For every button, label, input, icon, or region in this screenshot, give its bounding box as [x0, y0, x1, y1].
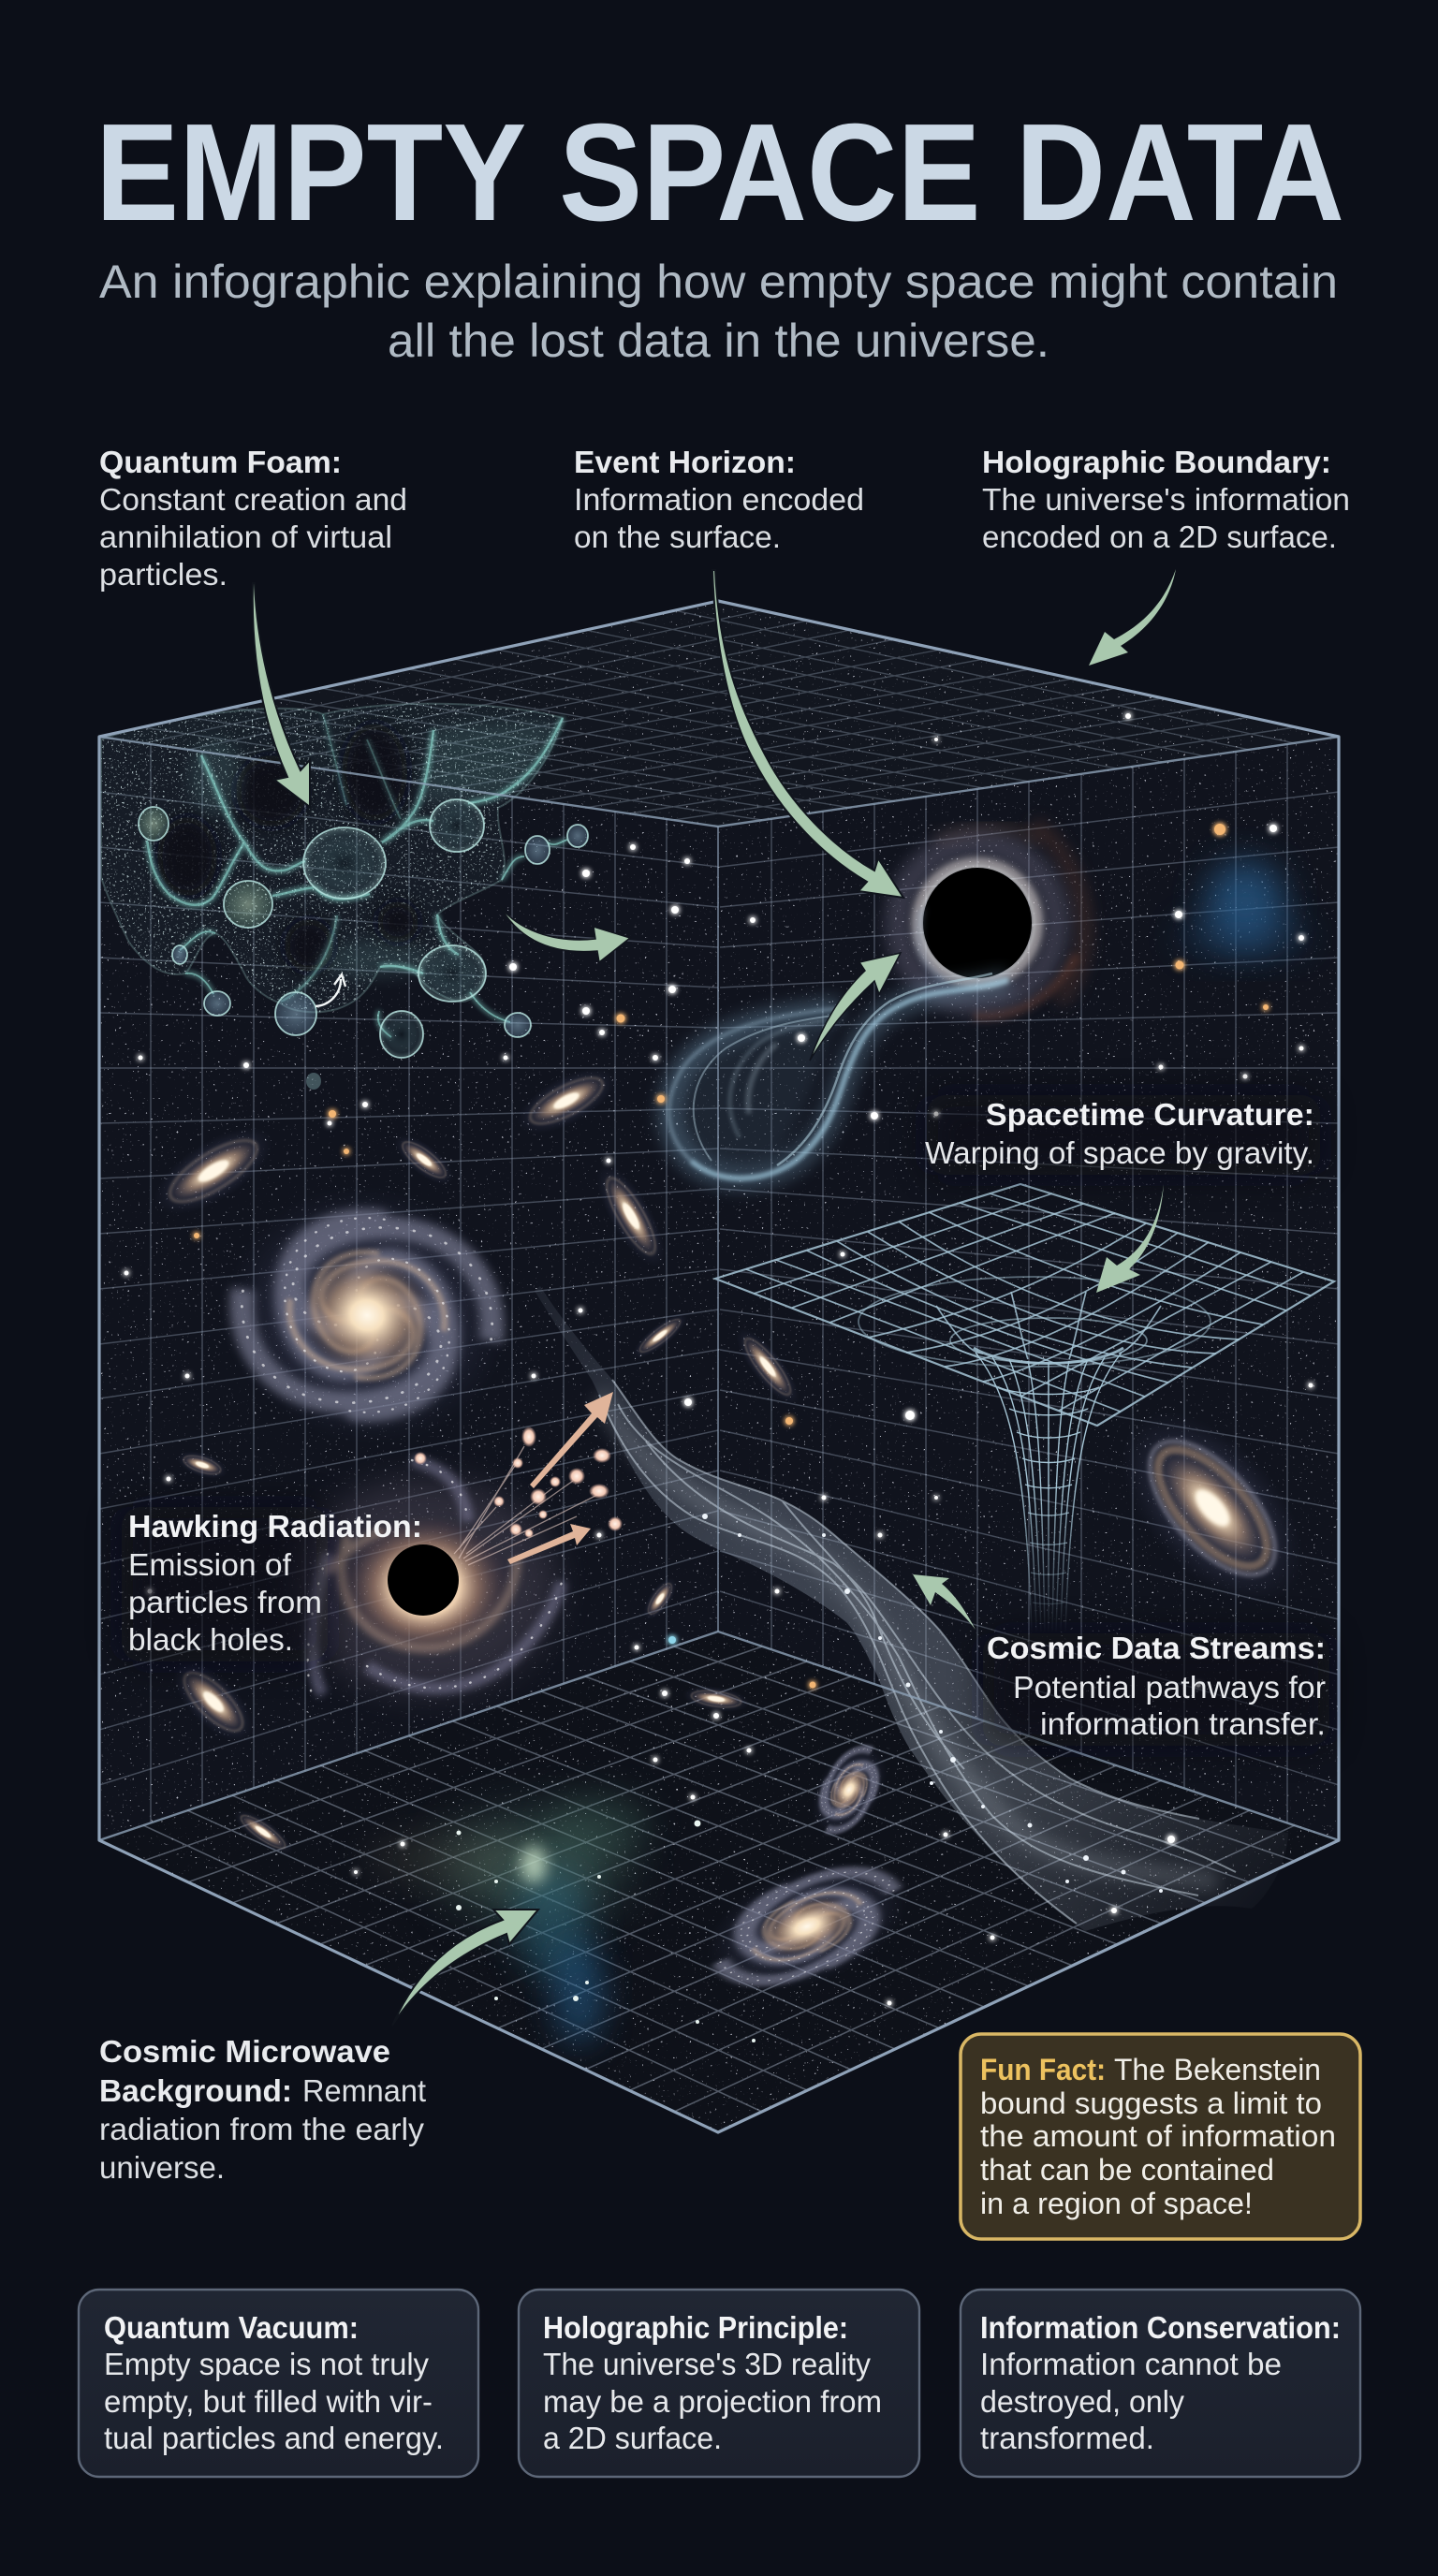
label: event horizon: Event Horizon: [574, 445, 796, 479]
arrow: spacetime curvature [1096, 1184, 1164, 1293]
callout: fun fact: in a region of space! [980, 2187, 1253, 2220]
label: cosmic microwave background: Background: [99, 2073, 292, 2108]
card: holographic principle: Holographic Principle: [543, 2310, 848, 2345]
foam speckle [99, 697, 567, 1016]
radiated particles [414, 1427, 623, 1538]
label: holographic boundary: Holographic Boundary: [982, 445, 1331, 479]
label: cosmic microwave background: radiation from the early [99, 2112, 425, 2146]
label: quantum foam: Quantum Foam: [99, 445, 342, 479]
bright stars [124, 713, 1313, 2005]
arrow: cosmic data streams [913, 1574, 976, 1630]
card: information conservation: Information Conservation: [980, 2310, 1341, 2345]
data stream into black hole [668, 908, 1008, 1178]
subtitle [99, 256, 1338, 367]
label: hawking radiation: Emission of [128, 1547, 292, 1582]
grid: right wall [720, 744, 1339, 1822]
warped sheet [715, 1184, 1334, 1426]
card: holographic principle: a 2D surface. [543, 2421, 722, 2455]
card: holographic principle: The universe's 3D reality [543, 2347, 871, 2381]
label: hawking radiation: particles from [128, 1585, 322, 1619]
label: hawking radiation [128, 1509, 422, 1657]
subtitle: An infographic explaining how empty space might contain [99, 256, 1338, 308]
callout: fun fact: the amount of information [980, 2119, 1336, 2153]
label: cosmic microwave background: universe. [99, 2150, 225, 2185]
label: hawking radiation: black holes. [128, 1622, 293, 1657]
label: event horizon: on the surface. [574, 520, 781, 554]
cosmic data stream ribbon [535, 1286, 1288, 1931]
label: cosmic microwave background: Remnant [302, 2073, 426, 2108]
label: spacetime curvature [925, 1097, 1314, 1170]
card: information conservation: destroyed, only [980, 2384, 1184, 2419]
funnel [976, 1353, 1122, 1633]
label: quantum foam: Constant creation and [99, 482, 407, 517]
label: cosmic data streams [987, 1631, 1326, 1741]
quantum foam [99, 697, 588, 1090]
label: spacetime curvature: Warping of space by gravity. [925, 1135, 1314, 1170]
label: holographic boundary [982, 445, 1350, 554]
label: quantum foam: particles. [99, 557, 227, 592]
grid: floor [143, 1647, 1295, 2112]
radiation rays [454, 1446, 597, 1565]
label: hawking radiation: Hawking Radiation: [128, 1509, 422, 1544]
nebula: blue cluster on right wall [1178, 860, 1309, 957]
grid: top face [143, 610, 1295, 820]
membrane [101, 704, 563, 1012]
arrow: holographic boundary [1089, 569, 1176, 666]
star field [99, 601, 1339, 2132]
card: quantum vacuum: Empty space is not truly [104, 2347, 429, 2381]
lobes of denser foam [189, 723, 557, 978]
arrow: cosmic microwave background [392, 1910, 538, 2026]
label: holographic boundary: The universe's information [982, 482, 1350, 517]
web strands [147, 714, 567, 1037]
label: quantum foam [99, 445, 407, 592]
card: information conservation [961, 2290, 1360, 2477]
cube faces [99, 601, 1339, 2132]
subtitle: all the lost data in the universe. [388, 315, 1049, 367]
small galaxies [140, 1055, 809, 1862]
panel: holographic cube [99, 601, 1339, 2132]
galaxy: large spiral [198, 1155, 536, 1475]
card: quantum vacuum: Quantum Vacuum: [104, 2310, 359, 2345]
arrow: event horizon [712, 570, 903, 898]
black hole: event horizon [899, 824, 1085, 1017]
card: information conservation: transformed. [980, 2421, 1154, 2455]
label: cosmic data streams: Cosmic Data Streams: [987, 1631, 1326, 1665]
text shadows inside cube [122, 1095, 1329, 1746]
card: holographic principle [519, 2290, 919, 2477]
label: holographic boundary: encoded on a 2D surface. [982, 520, 1337, 554]
card: quantum vacuum: empty, but filled with vir- [104, 2384, 433, 2419]
label: cosmic data streams: Potential pathways for [1013, 1670, 1326, 1705]
arrow: stream to black hole [810, 953, 901, 1061]
galaxy: floor spiral [689, 1837, 925, 2016]
bubbles [139, 799, 588, 1090]
title: EMPTY SPACE DATA [95, 95, 1344, 250]
card: quantum vacuum: tual particles and energy. [104, 2421, 444, 2455]
callout: fun fact: bound suggests a limit to [980, 2086, 1322, 2120]
nebula: cosmic microwave background [365, 1793, 756, 2045]
label: cosmic microwave background: Cosmic Microwave [99, 2034, 390, 2069]
label: cosmic data streams: information transfer. [1040, 1706, 1326, 1741]
galaxy: right wall elliptical [1087, 1379, 1338, 1637]
spacetime curvature grid [715, 1184, 1334, 1633]
card: quantum vacuum [79, 2290, 478, 2477]
card: holographic principle: may be a projection from [543, 2384, 882, 2419]
galaxy: floor small spiral [796, 1731, 902, 1849]
arrow: hawking radiation lower [507, 1524, 591, 1564]
grid: left wall [99, 744, 718, 1822]
cube edges [99, 601, 1339, 2132]
arrow: hawking radiation upper [530, 1392, 613, 1488]
label: quantum foam: annihilation of virtual [99, 520, 392, 554]
callout: fun fact [961, 2034, 1360, 2239]
callout: fun fact: Fun Fact: [980, 2053, 1106, 2086]
small white arrow [315, 974, 345, 1006]
label: cosmic microwave background [99, 2034, 426, 2185]
label: event horizon [574, 445, 864, 554]
dark gaps in foam [157, 724, 418, 972]
callout: fun fact: The Bekenstein [1114, 2053, 1321, 2086]
arrow: quantum foam [253, 583, 310, 807]
label: event horizon: Information encoded [574, 482, 864, 517]
arrow: foam to space [500, 906, 630, 962]
label: spacetime curvature: Spacetime Curvature: [986, 1097, 1314, 1132]
card: information conservation: Information cannot be [980, 2347, 1282, 2381]
callout: fun fact: that can be contained [980, 2153, 1274, 2187]
black hole: hawking radiation [295, 1427, 623, 1699]
